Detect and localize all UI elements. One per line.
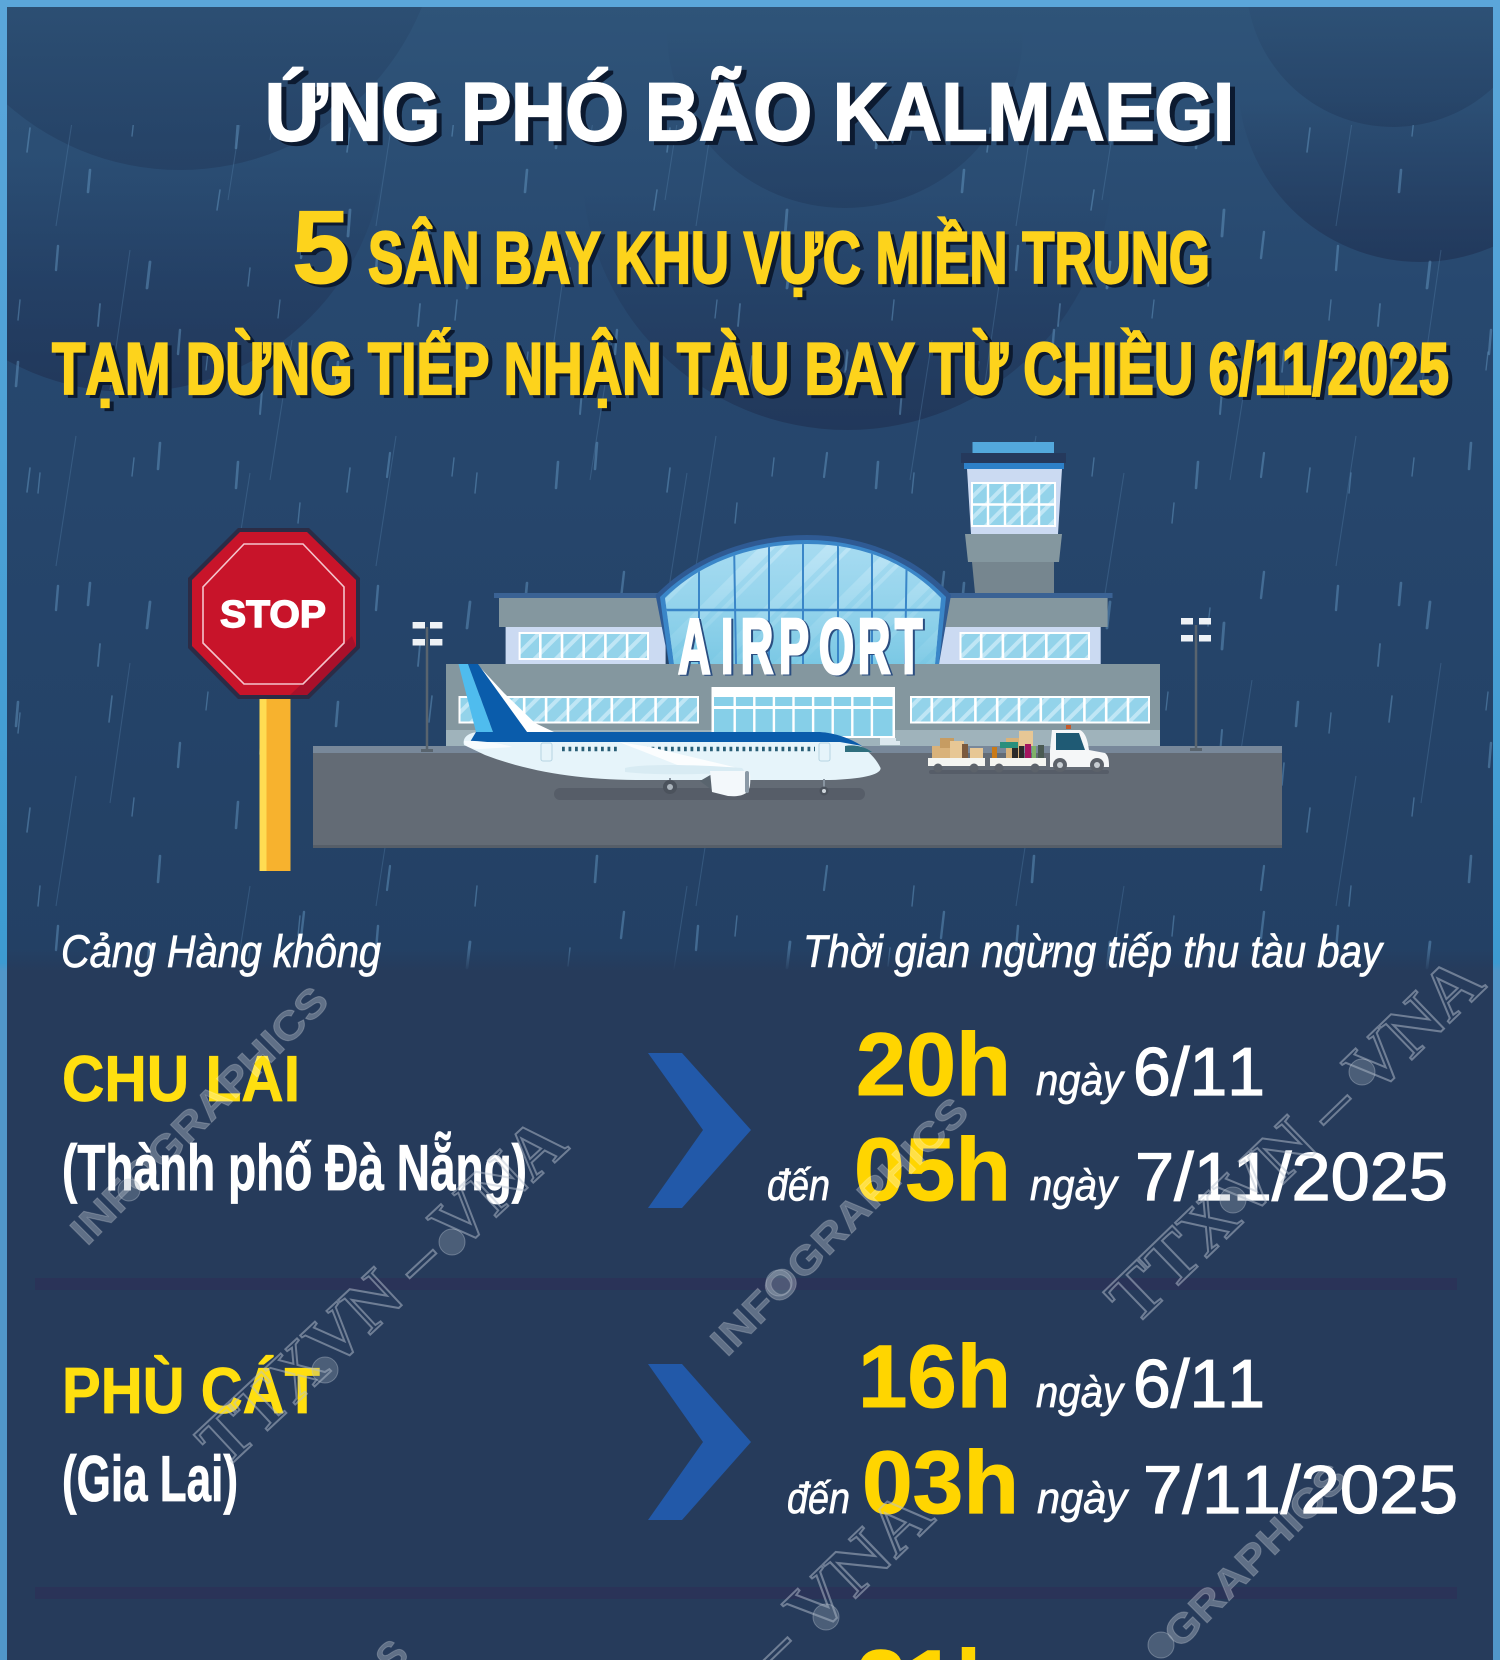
row: Chu Lai: ngày — [1036, 1056, 1126, 1105]
row: Phù Cát: PHÙ CÁT — [62, 1354, 320, 1427]
row: Phù Cát: ngày — [1036, 1368, 1126, 1417]
subtitle: SÂN BAY KHU VỰC MIỀN TRUNG — [368, 218, 1210, 299]
control tower — [961, 442, 1066, 593]
glass dome — [656, 535, 951, 664]
stop sign — [188, 528, 360, 871]
row: Chu Lai: 05h — [854, 1119, 1011, 1219]
row: Chu Lai: 6/11 — [1133, 1034, 1265, 1110]
row: Chu Lai: 7/11/2025 — [1135, 1139, 1448, 1215]
baggage tractor and carts — [928, 725, 1109, 774]
row: Chu Lai — [62, 1014, 1448, 1219]
rain — [7, 125, 1493, 970]
lamp post left — [413, 622, 442, 752]
row: Chu Lai: ngày — [1030, 1161, 1120, 1210]
row: Phù Cát: ngày — [1037, 1474, 1130, 1523]
watermarks: INFOGRAPHICS — [62, 978, 337, 1253]
terminal building — [446, 593, 1160, 746]
watermarks: TTXVN – VNA — [181, 1101, 581, 1482]
row: Chu Lai: CHU LAI — [62, 1042, 300, 1115]
watermarks: INFOGRAPHICS — [702, 1089, 977, 1364]
row: Phù Cát: (Gia Lai) — [62, 1442, 238, 1515]
divider 2 — [35, 1587, 1457, 1599]
illustration: airport scene — [188, 442, 1282, 871]
row: Chu Lai: (Thành phố Đà Nẵng) — [62, 1131, 527, 1204]
row: Chu Lai: đến — [767, 1161, 830, 1210]
watermarks: GRAPHICS — [1155, 1456, 1356, 1656]
title: ỨNG PHÓ BÃO KALMAEGI — [265, 67, 1234, 158]
row: Phù Cát: 16h — [858, 1326, 1011, 1426]
airport sign: AIRPORT — [678, 602, 923, 690]
apron — [313, 746, 1282, 848]
storm clouds — [0, 0, 1500, 430]
column header: suspension time: Thời gian ngừng tiếp thu tàu bay — [803, 926, 1384, 977]
row: Phù Cát: 7/11/2025 — [1143, 1452, 1458, 1528]
lamp post right — [1181, 618, 1211, 751]
watermarks: TTXVN – VNA — [1091, 941, 1499, 1339]
row: Phù Cát: đến — [787, 1474, 850, 1523]
subtitle — [52, 190, 1449, 410]
airplane — [458, 664, 881, 800]
subtitle: 5 — [292, 190, 350, 306]
row: Phù Cát: 6/11 — [1133, 1346, 1265, 1422]
lower table panel — [0, 948, 1500, 1660]
row: Phù Cát — [62, 1326, 1458, 1532]
sky background — [0, 0, 1500, 970]
row: Chu Lai: 20h — [856, 1014, 1011, 1114]
row: Phù Cát: 03h — [862, 1432, 1019, 1532]
divider 1 — [35, 1278, 1457, 1290]
watermarks — [62, 941, 1499, 1660]
column header: airport: Cảng Hàng không — [61, 926, 381, 977]
stop sign: STOP — [220, 594, 326, 636]
